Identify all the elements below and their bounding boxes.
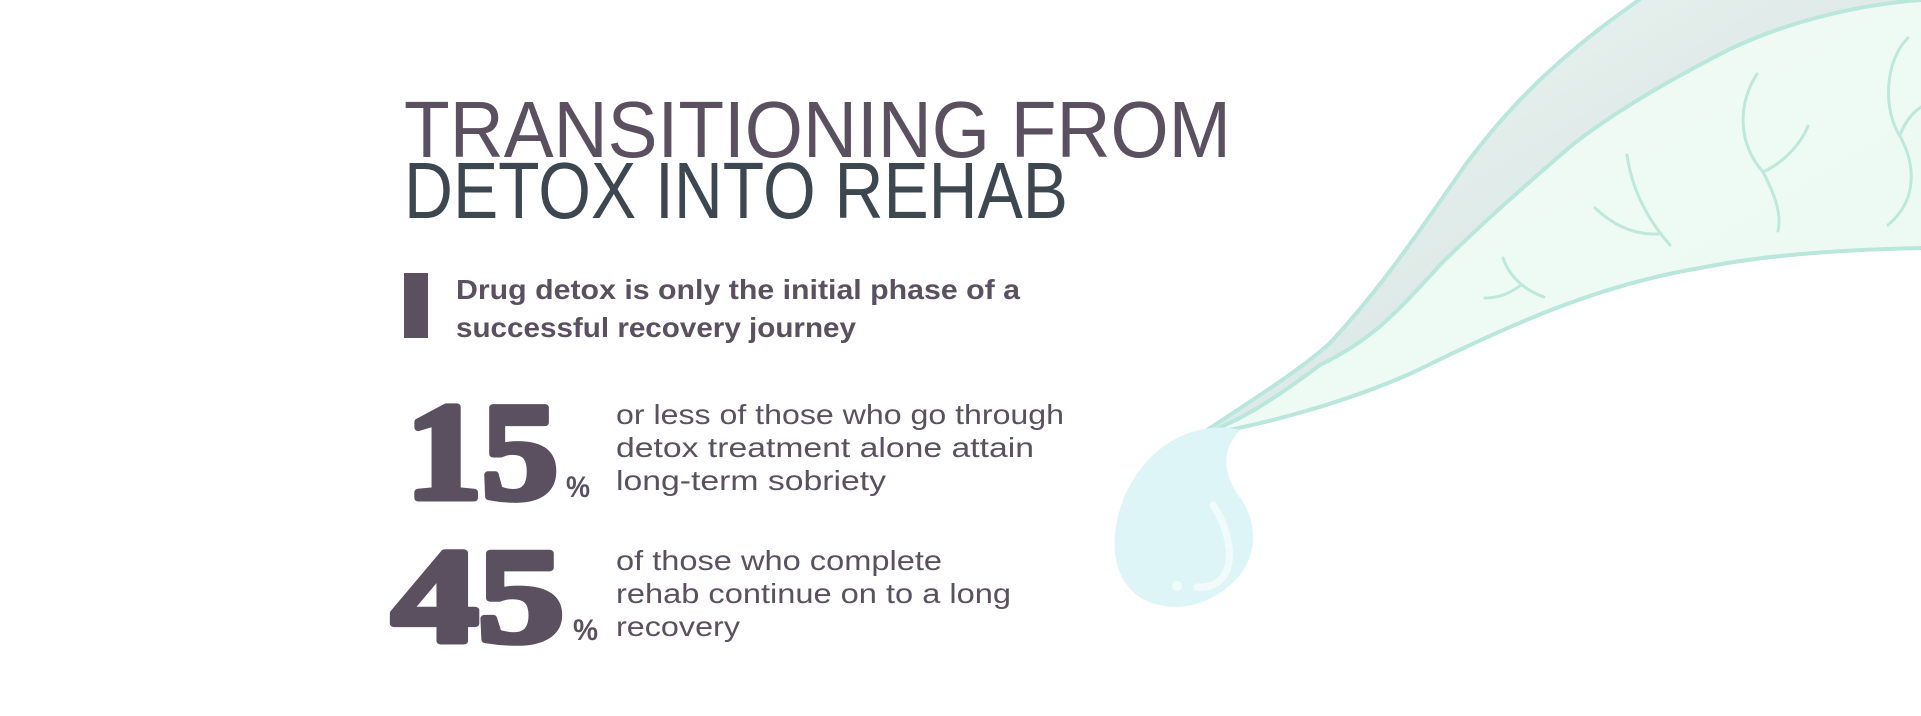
leaf veins <box>1485 38 1921 298</box>
stat: 45%: recovery <box>616 611 740 642</box>
title: DETOX INTO REHAB <box>404 146 1068 235</box>
stat: 45%: of those who complete <box>616 545 942 576</box>
leaf illustration <box>1198 0 1921 436</box>
title: TRANSITIONING FROM <box>404 85 1231 174</box>
stat: 15%: % <box>566 471 590 504</box>
stat: 15%: long-term sobriety <box>616 465 886 496</box>
stat: 45% <box>392 522 1011 670</box>
stat: 15%: or less of those who go through <box>616 399 1064 430</box>
stat: 15% <box>406 375 1064 528</box>
leaf body <box>1198 0 1921 436</box>
stat: 45%: rehab continue on to a long <box>616 578 1011 609</box>
subtitle with bar: successful recovery journey <box>456 312 856 343</box>
title <box>404 85 1231 235</box>
stat: 15%: 15 <box>406 375 558 528</box>
subtitle with bar <box>404 273 1020 343</box>
stat: 45%: % <box>573 614 598 647</box>
leaf outlines <box>1198 0 1921 436</box>
icon: water drop <box>1115 428 1253 607</box>
stat: 15%: detox treatment alone attain <box>616 432 1034 463</box>
leaf dark band <box>1198 0 1921 436</box>
stat: 45%: 45 <box>392 522 564 670</box>
subtitle with bar: Drug detox is only the initial phase of a <box>456 274 1020 305</box>
